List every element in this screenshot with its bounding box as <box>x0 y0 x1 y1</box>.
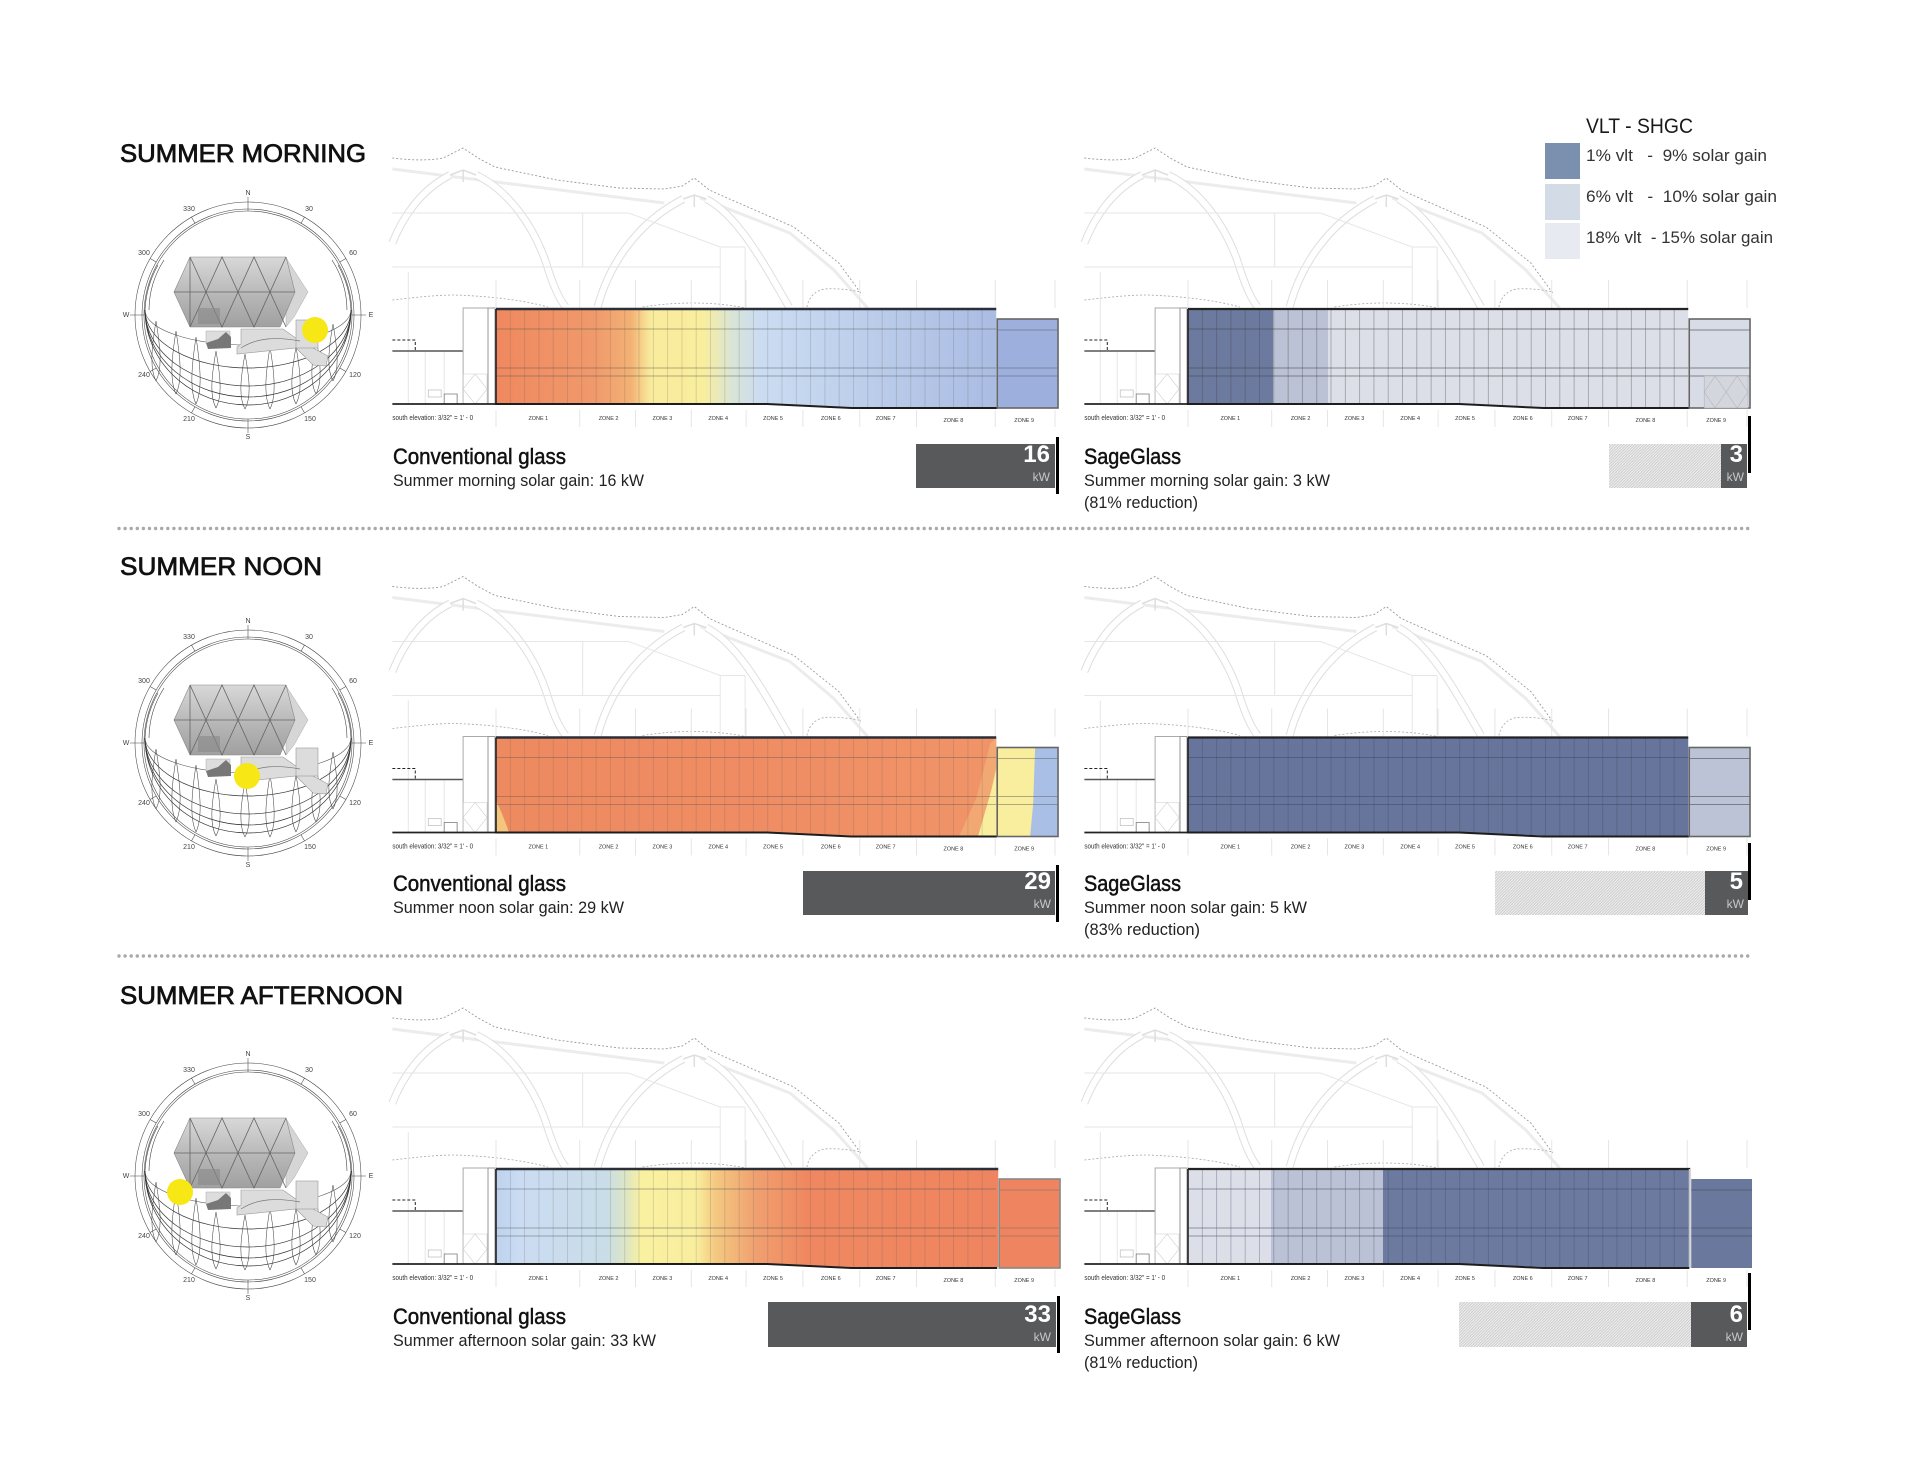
legend: VLT - SHGC: 6% vlt - 10% solar gain <box>1586 187 1777 206</box>
sun path diagram: morning: 300 <box>138 250 150 257</box>
panel: sageglass morning elevation: ZONE 1 <box>1220 416 1240 422</box>
bar: conventional morning 16 kW: 16 <box>1023 441 1050 468</box>
panel: conventional glass noon elevation: ZONE 2 <box>599 844 618 851</box>
panel: sageglass morning elevation: south elevation: 3/32" = 1' - 0 <box>1084 415 1165 422</box>
sun path diagram: morning: 120 <box>349 372 361 379</box>
sun path diagram: afternoon: 60 <box>349 1111 357 1118</box>
sun path diagram: morning <box>123 190 374 441</box>
sun path diagram: noon: 120 <box>349 800 361 807</box>
panel: conventional glass noon elevation: ZONE 1 <box>528 844 548 851</box>
sun path diagram: noon: 60 <box>349 678 357 685</box>
title: summer afternoon: SUMMER AFTERNOON <box>120 982 403 1010</box>
sun path diagram: morning: 150 <box>304 416 316 423</box>
sun path diagram: morning: 30 <box>305 206 313 213</box>
text: sageglass noon caption: Summer noon solar gain: 5 kW <box>1084 898 1307 917</box>
panel: conventional glass afternoon elevation: ZONE 1 <box>528 1276 548 1282</box>
panel: sageglass morning elevation: ZONE 2 <box>1291 416 1310 422</box>
panel: conventional glass afternoon elevation: ZONE 4 <box>708 1276 728 1282</box>
panel: conventional glass afternoon elevation: ZONE 3 <box>653 1276 672 1282</box>
panel: conventional glass noon elevation <box>392 576 1058 856</box>
panel: sageglass afternoon elevation: ZONE 8 <box>1636 1278 1655 1284</box>
sun path diagram: afternoon: E <box>369 1173 374 1180</box>
sun path diagram: afternoon: N <box>245 1051 251 1058</box>
sun path diagram: afternoon: 300 <box>138 1111 150 1118</box>
legend: VLT - SHGC: VLT - SHGC <box>1586 115 1693 138</box>
panel: sageglass afternoon elevation: ZONE 1 <box>1220 1276 1240 1282</box>
legend: VLT - SHGC <box>1545 115 1777 259</box>
panel: sageglass morning elevation: ZONE 6 <box>1513 416 1533 422</box>
panel: conventional glass noon elevation: ZONE 4 <box>708 844 728 851</box>
bar: sageglass afternoon 6 kW <box>1459 1273 1751 1347</box>
panel: sageglass morning elevation <box>1084 148 1750 427</box>
panel: sageglass noon elevation: ZONE 5 <box>1455 844 1475 851</box>
bar: conventional morning 16 kW: kW <box>1033 470 1051 484</box>
text: sageglass afternoon caption <box>1084 1304 1340 1372</box>
panel: sageglass afternoon elevation: ZONE 9 <box>1706 1278 1726 1284</box>
text: sageglass morning caption <box>1084 444 1330 512</box>
panel: conventional glass noon elevation: south elevation: 3/32" = 1' - 0 <box>392 843 473 851</box>
panel: conventional glass afternoon elevation: ZONE 9 <box>1014 1278 1034 1284</box>
panel: conventional glass morning elevation: ZONE 2 <box>599 416 618 422</box>
bar: sageglass morning 3 kW <box>1609 416 1751 488</box>
bar: sageglass noon 5 kW: kW <box>1727 897 1745 911</box>
sun path diagram: noon: N <box>245 618 251 625</box>
sun path diagram: afternoon: S <box>246 1295 251 1302</box>
text: sageglass noon caption <box>1084 871 1307 939</box>
panel: sageglass noon elevation: ZONE 8 <box>1636 846 1655 853</box>
panel: sageglass afternoon elevation: ZONE 7 <box>1568 1276 1588 1282</box>
panel: sageglass noon elevation: south elevation: 3/32" = 1' - 0 <box>1084 843 1165 851</box>
panel: conventional glass noon elevation: ZONE 9 <box>1014 846 1034 853</box>
sun path diagram: afternoon: 210 <box>183 1277 195 1284</box>
panel: sageglass noon elevation: ZONE 3 <box>1345 844 1364 851</box>
panel: conventional glass noon elevation: ZONE 5 <box>763 844 783 851</box>
text: sageglass morning caption: Summer morning solar gain: 3 kW <box>1084 471 1330 490</box>
sun path diagram: afternoon: 330 <box>183 1067 195 1074</box>
panel: conventional glass afternoon elevation: ZONE 8 <box>944 1278 963 1284</box>
text: sageglass afternoon caption: (81% reduction) <box>1084 1353 1198 1372</box>
bar: sageglass afternoon 6 kW: 6 <box>1730 1301 1743 1328</box>
sun path diagram: noon: 30 <box>305 634 313 641</box>
panel: conventional glass afternoon elevation: ZONE 2 <box>599 1276 618 1282</box>
sun path diagram: afternoon: 150 <box>304 1277 316 1284</box>
text: sageglass noon caption: (83% reduction) <box>1084 920 1200 939</box>
panel: conventional glass afternoon elevation <box>392 1008 1060 1287</box>
panel: conventional glass morning elevation: ZONE 8 <box>944 418 963 424</box>
text: conventional noon caption: Conventional glass <box>393 871 566 896</box>
bar: conventional noon 29 kW: 29 <box>1024 868 1051 895</box>
panel: conventional glass afternoon elevation: south elevation: 3/32" = 1' - 0 <box>392 1275 473 1282</box>
bar: conventional morning 16 kW <box>916 437 1059 494</box>
bar: conventional noon 29 kW: kW <box>1034 897 1052 911</box>
panel: conventional glass noon elevation: ZONE 8 <box>944 846 963 853</box>
panel: conventional glass morning elevation: ZONE 3 <box>653 416 672 422</box>
panel: sageglass noon elevation: ZONE 4 <box>1400 844 1420 851</box>
sun path diagram: noon: W <box>123 740 130 747</box>
icon: sun <box>302 317 328 343</box>
panel: conventional glass morning elevation: ZONE 9 <box>1014 418 1034 424</box>
panel: conventional glass afternoon elevation: ZONE 7 <box>876 1276 896 1282</box>
panel: sageglass noon elevation <box>1084 576 1750 856</box>
bar: sageglass noon 5 kW <box>1495 843 1751 915</box>
sun path diagram: noon: E <box>369 740 374 747</box>
panel: sageglass morning elevation: ZONE 7 <box>1568 416 1588 422</box>
panel: conventional glass morning elevation: ZONE 7 <box>876 416 896 422</box>
sun path diagram: afternoon: W <box>123 1173 130 1180</box>
panel: sageglass afternoon elevation: ZONE 3 <box>1345 1276 1364 1282</box>
panel: conventional glass morning elevation: ZONE 5 <box>763 416 783 422</box>
panel: conventional glass noon elevation: ZONE 3 <box>653 844 672 851</box>
panel: sageglass afternoon elevation: ZONE 5 <box>1455 1276 1475 1282</box>
text: sageglass morning caption: (81% reduction) <box>1084 493 1198 512</box>
sun path diagram: afternoon: 120 <box>349 1233 361 1240</box>
panel: sageglass afternoon elevation <box>1084 1008 1752 1287</box>
bar: conventional afternoon 33 kW: 33 <box>1024 1301 1051 1328</box>
text: conventional morning caption: Summer morning solar gain: 16 kW <box>393 471 644 490</box>
sun path diagram: morning: S <box>246 434 251 441</box>
sun path diagram: morning: N <box>245 190 251 197</box>
panel: conventional glass morning elevation: ZONE 4 <box>708 416 728 422</box>
sun path diagram: afternoon <box>123 1051 374 1302</box>
panel: sageglass noon elevation: ZONE 1 <box>1220 844 1240 851</box>
sun path diagram: morning: 60 <box>349 250 357 257</box>
panel: conventional glass morning elevation <box>392 148 1058 427</box>
panel: sageglass morning elevation: ZONE 8 <box>1636 418 1655 424</box>
sun path diagram: noon: S <box>246 862 251 869</box>
sun path diagram: afternoon: 240 <box>138 1233 150 1240</box>
text: conventional noon caption: Summer noon solar gain: 29 kW <box>393 898 624 917</box>
sun path diagram: morning: 240 <box>138 372 150 379</box>
panel: sageglass morning elevation: ZONE 4 <box>1400 416 1420 422</box>
icon: sun <box>234 763 260 789</box>
text: conventional noon caption <box>393 871 624 917</box>
sun path diagram: noon: 330 <box>183 634 195 641</box>
bar: conventional afternoon 33 kW: kW <box>1034 1330 1052 1344</box>
panel: sageglass noon elevation: ZONE 7 <box>1568 844 1588 851</box>
panel: sageglass noon elevation: ZONE 6 <box>1513 844 1533 851</box>
text: conventional morning caption: Conventional glass <box>393 444 566 469</box>
sun path diagram: morning: E <box>369 312 374 319</box>
panel: sageglass afternoon elevation: ZONE 6 <box>1513 1276 1533 1282</box>
panel: sageglass afternoon elevation: ZONE 2 <box>1291 1276 1310 1282</box>
bar: conventional afternoon 33 kW <box>768 1296 1060 1353</box>
panel: sageglass afternoon elevation: ZONE 4 <box>1400 1276 1420 1282</box>
sun path diagram: morning: W <box>123 312 130 319</box>
bar: sageglass afternoon 6 kW: kW <box>1726 1330 1744 1344</box>
panel: sageglass noon elevation: ZONE 9 <box>1706 846 1726 853</box>
icon: sun <box>167 1179 193 1205</box>
bar: sageglass morning 3 kW: 3 <box>1730 441 1743 468</box>
panel: sageglass morning elevation: ZONE 3 <box>1345 416 1364 422</box>
panel: conventional glass afternoon elevation: ZONE 6 <box>821 1276 841 1282</box>
panel: conventional glass morning elevation: ZONE 1 <box>528 416 548 422</box>
text: conventional afternoon caption: Conventional glass <box>393 1304 566 1329</box>
panel: conventional glass noon elevation: ZONE 6 <box>821 844 841 851</box>
panel: sageglass noon elevation: ZONE 2 <box>1291 844 1310 851</box>
text: conventional afternoon caption <box>393 1304 656 1350</box>
panel: sageglass afternoon elevation: south elevation: 3/32" = 1' - 0 <box>1084 1275 1165 1282</box>
panel: conventional glass morning elevation: ZONE 6 <box>821 416 841 422</box>
sun path diagram: noon: 240 <box>138 800 150 807</box>
text: sageglass afternoon caption: Summer afternoon solar gain: 6 kW <box>1084 1331 1340 1350</box>
panel: conventional glass afternoon elevation: ZONE 5 <box>763 1276 783 1282</box>
sun path diagram: morning: 330 <box>183 206 195 213</box>
sun path diagram: noon <box>123 618 374 869</box>
sun path diagram: noon: 300 <box>138 678 150 685</box>
text: sageglass noon caption: SageGlass <box>1084 871 1181 896</box>
panel: conventional glass noon elevation: ZONE 7 <box>876 844 896 851</box>
sun path diagram: noon: 210 <box>183 844 195 851</box>
bar: conventional noon 29 kW <box>803 865 1059 922</box>
text: conventional morning caption <box>393 444 644 490</box>
sun path diagram: noon: 150 <box>304 844 316 851</box>
title: summer morning: SUMMER MORNING <box>120 140 366 168</box>
panel: sageglass morning elevation: ZONE 5 <box>1455 416 1475 422</box>
sun path diagram: morning: 210 <box>183 416 195 423</box>
sun path diagram: afternoon: 30 <box>305 1067 313 1074</box>
legend: VLT - SHGC: 18% vlt - 15% solar gain <box>1586 228 1773 247</box>
text: sageglass morning caption: SageGlass <box>1084 444 1181 469</box>
bar: sageglass morning 3 kW: kW <box>1727 470 1745 484</box>
bar: sageglass noon 5 kW: 5 <box>1730 868 1743 895</box>
text: conventional afternoon caption: Summer afternoon solar gain: 33 kW <box>393 1331 656 1350</box>
text: sageglass afternoon caption: SageGlass <box>1084 1304 1181 1329</box>
panel: sageglass morning elevation: ZONE 9 <box>1706 418 1726 424</box>
legend: VLT - SHGC: 1% vlt - 9% solar gain <box>1586 146 1767 165</box>
panel: conventional glass morning elevation: south elevation: 3/32" = 1' - 0 <box>392 415 473 422</box>
title: summer noon: SUMMER NOON <box>120 553 322 581</box>
